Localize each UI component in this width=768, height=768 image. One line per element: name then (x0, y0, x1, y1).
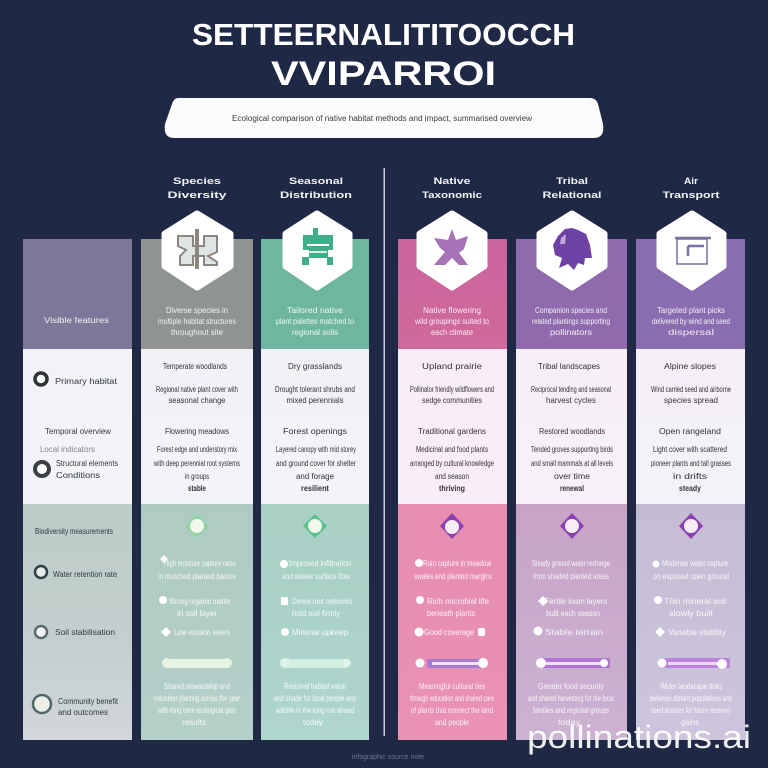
icon: purple diamond (440, 513, 464, 539)
panel: column 5: gains (681, 718, 699, 727)
title: VVIPARROI (271, 55, 496, 93)
panel: column 1: Temperate woodlands (163, 362, 227, 371)
panel: column 2: resilient (301, 484, 329, 493)
panel: column 3: arranged by cultural knowledge (410, 459, 494, 468)
panel: column 5: Thin mineral soil (664, 597, 726, 606)
icon: ring four (35, 626, 47, 638)
panel: column 2: wildlife in the long run ahead (275, 706, 354, 715)
panel: column 4: Reciprocal tending and seasonal (531, 385, 611, 394)
panel: column 2: mixed perennials (286, 396, 344, 405)
panel: row labels column: Soil stabilisation (55, 628, 115, 637)
panel: column 3 (398, 214, 507, 740)
panel: column 5: between distant populations and (650, 694, 732, 703)
panel: column 5: Moderate water capture (662, 559, 728, 568)
icon: purple diamond (560, 513, 584, 539)
panel: column 5: pioneer plants and tall grasses (651, 459, 731, 468)
panel: column 2: and shade for local people and (274, 694, 356, 703)
panel: column 1: with deep perennial root systems (153, 459, 240, 468)
panel: column 1: multiple habitat structures (158, 317, 236, 326)
panel: column 2: and forage (296, 472, 335, 481)
watermark: pollinations.ai (527, 719, 751, 755)
panel: column 1: results (182, 718, 206, 727)
panel: column 3: of plants that connect the land (411, 706, 493, 715)
panel: column 4: from shaded planted areas (533, 572, 609, 581)
panel: column 4: Tribal landscapes (538, 362, 600, 371)
panel: column 2 (261, 214, 369, 740)
title: SETTEERNALITITOOCCH (192, 17, 575, 52)
panel: column 1: in soil layer (177, 609, 217, 618)
panel: column 5: Alpine slopes (664, 362, 716, 371)
panel: column 5: in drifts (673, 472, 707, 481)
panel: row labels column: Visible features (44, 316, 109, 325)
panel: column 2: Dense root networks (292, 597, 352, 606)
panel: column 2: today (303, 718, 323, 727)
panel: column 2: Restored habitat value (284, 682, 346, 691)
panel: column 2: Dry grasslands (288, 362, 342, 371)
panel: row labels column: Water retention rate (53, 570, 117, 579)
panel: column 2: Minimal upkeep (292, 628, 349, 637)
panel: row labels column: Temporal overview (45, 427, 111, 436)
panel: column 1: Forest edge and understory mix (157, 445, 237, 454)
panel: column 1: Flowering meadows (165, 427, 229, 436)
column headings: Tribal (556, 176, 588, 186)
panel: row labels column: Conditions (56, 471, 100, 480)
panel: column 4: Restored woodlands (539, 427, 605, 436)
panel: column 5: Targeted plant picks (657, 306, 725, 315)
panel: column 1 (141, 214, 253, 740)
panel: column 1: seasonal change (168, 396, 226, 405)
progress bar (162, 658, 232, 668)
panel: column 1: with long term ecological gain (157, 706, 236, 715)
panel: column 3: swales and planted margins (414, 572, 492, 581)
progress bar (536, 658, 610, 668)
icon: ring three (35, 566, 47, 578)
panel: column 4: and small mammals at all levels (531, 459, 613, 468)
panel: column 4: harvest cycles (546, 396, 596, 405)
panel: column 4: Fertile loam layers (545, 597, 607, 606)
panel: column 1: throughout site (171, 328, 224, 337)
column headings: Seasonal (289, 176, 343, 186)
panel: row labels column: Community benefit (58, 697, 119, 706)
panel: column 1: stable (188, 484, 206, 493)
panel: column 5: Light cover with scattered (653, 445, 727, 454)
icon: hexagon native plant (286, 214, 349, 287)
icon: hexagon purple plant (540, 214, 604, 287)
panel: column 3: Medicinal and food plants (416, 445, 488, 454)
panel: column 3: Pollinator friendly wildflowers and (410, 385, 494, 394)
icon: ring one (35, 373, 47, 385)
panel: column 2: Tailored native (287, 306, 344, 315)
panel: column 4: Stable terrain (545, 628, 603, 637)
footer note: infographic source note (352, 754, 424, 761)
panel: column 2: Forest openings (283, 427, 347, 436)
subtitle banner (165, 98, 603, 138)
column headings: Diversity (168, 190, 226, 200)
panel: column 5: Open rangeland (659, 427, 721, 436)
panel: column 4: pollinators (550, 328, 592, 337)
icon: green diamond (185, 514, 209, 538)
column headings: Taxonomic (422, 190, 482, 200)
panel: column 2: regional soils (292, 328, 338, 337)
column headings: Distribution (280, 190, 352, 200)
column headings (168, 176, 720, 200)
panel: column 1: volunteer planting across the year (154, 694, 240, 703)
panel: column 1: Low erosion levels (174, 628, 230, 637)
panel: column 3: and season (435, 472, 469, 481)
panel: column 1: Shared stewardship and (164, 682, 230, 691)
panel: column 4 (516, 214, 627, 740)
panel: column 4: renewal (560, 484, 584, 493)
panel: row labels column: Primary habitat (55, 377, 118, 386)
panel: column 5: species spread (664, 396, 718, 405)
icon: hexagon native star (420, 214, 484, 287)
panel: column 1: High moisture capture rates (164, 559, 236, 568)
panel: column 5: slowly built (669, 609, 714, 618)
progress bar (416, 658, 488, 668)
panel: column 3: Native flowering (423, 306, 481, 315)
panel: column 5 (636, 214, 745, 740)
panel: column 3: Good coverage (424, 628, 475, 637)
panel: column 5: seed sources for future recovery (651, 706, 731, 715)
progress bar (658, 658, 730, 669)
subtitle banner: Ecological comparison of native habitat methods and impact, summarised overview (232, 114, 532, 123)
panel: column 1: Strong organic matter (169, 597, 231, 606)
panel: column 5: Wind carried seed and airborne (651, 385, 731, 394)
column headings: Relational (542, 190, 602, 200)
panel: column 4: today (558, 718, 580, 727)
panel: column 3: through education and shared care (410, 694, 494, 703)
panel: column 1: Regional native plant cover with (156, 385, 238, 394)
panel: column 4: Greater food security (538, 682, 604, 691)
title (192, 17, 575, 93)
panel: column 2: Improved infiltration (289, 559, 351, 568)
panel: column 4: related plantings supporting (532, 317, 610, 326)
panel: row labels column (23, 239, 132, 740)
panel: column 2: plant palettes matched to (276, 317, 354, 326)
icon: purple diamond (679, 513, 703, 539)
icon: ring two (35, 462, 49, 476)
panel: column 4: Steady ground water recharge (532, 559, 610, 568)
panel: column 3: beneath plants (427, 609, 475, 618)
panel: column 5: Wider landscape links (660, 682, 722, 691)
panel: column 2: Drought tolerant shrubs and (275, 385, 355, 394)
panel: column 1: in groups (185, 472, 209, 481)
panel: column 3: Rain capture in meadow (423, 559, 491, 568)
panel: column 4: and shared harvesting for the local (528, 694, 614, 703)
progress bar (280, 658, 351, 668)
panel: column 4: Companion species and (535, 306, 607, 315)
column headings: Species (173, 176, 221, 186)
panel: column 1: Diverse species in (166, 306, 228, 315)
panel: column 2: and slower surface flow (282, 572, 350, 581)
panel: column 4: families and regional groups (533, 706, 609, 715)
panel: column 4: built each season (546, 609, 600, 618)
panel: row labels column: and outcomes (58, 708, 108, 717)
panel: column 4: over time (554, 472, 591, 481)
panel: row labels column: Structural elements (56, 459, 118, 468)
panel: column 4: Tended groves supporting birds (531, 445, 613, 454)
panel: column 3: and people (435, 718, 469, 727)
panel: column 3: Upland prairie (422, 362, 483, 371)
icon: green diamond (303, 514, 327, 538)
icon: ring five (33, 695, 51, 713)
panel: column 3: Traditional gardens (418, 427, 486, 436)
panel: row labels column: Biodiversity measurements (35, 527, 113, 536)
panel: column 2: Layered canopy with mid storey (276, 445, 356, 454)
icon: hexagon document (660, 214, 723, 287)
panel: column 2: and ground cover for shelter (276, 459, 356, 468)
panel: row labels column: Local indicators (40, 445, 95, 454)
panel: column 5: on exposed open ground (653, 572, 729, 581)
panel: column 2: hold soil firmly (292, 609, 340, 618)
panel: column 3: sedge communities (422, 396, 482, 405)
icon: hexagon species (165, 214, 230, 287)
panel: column 3: thriving (439, 484, 465, 493)
panel: column 5: Variable stability (668, 628, 726, 637)
panel: column 1: in mulched planted basins (158, 572, 236, 581)
panel: column 5: delivered by wind and seed (652, 317, 730, 326)
column headings: Transport (662, 190, 720, 200)
panel: column 3: each climate (431, 328, 474, 337)
panel: column 3: wild groupings suited to (414, 317, 489, 326)
column headings: Native (434, 176, 470, 186)
column headings: Air (684, 176, 699, 186)
panel: column 5: steady (679, 484, 701, 493)
panel: column 5: dispersal (668, 328, 714, 337)
panel: column 3: Meaningful cultural ties (419, 682, 485, 691)
panel: column 3: Rich microbial life (427, 597, 490, 606)
divider line (384, 168, 385, 736)
